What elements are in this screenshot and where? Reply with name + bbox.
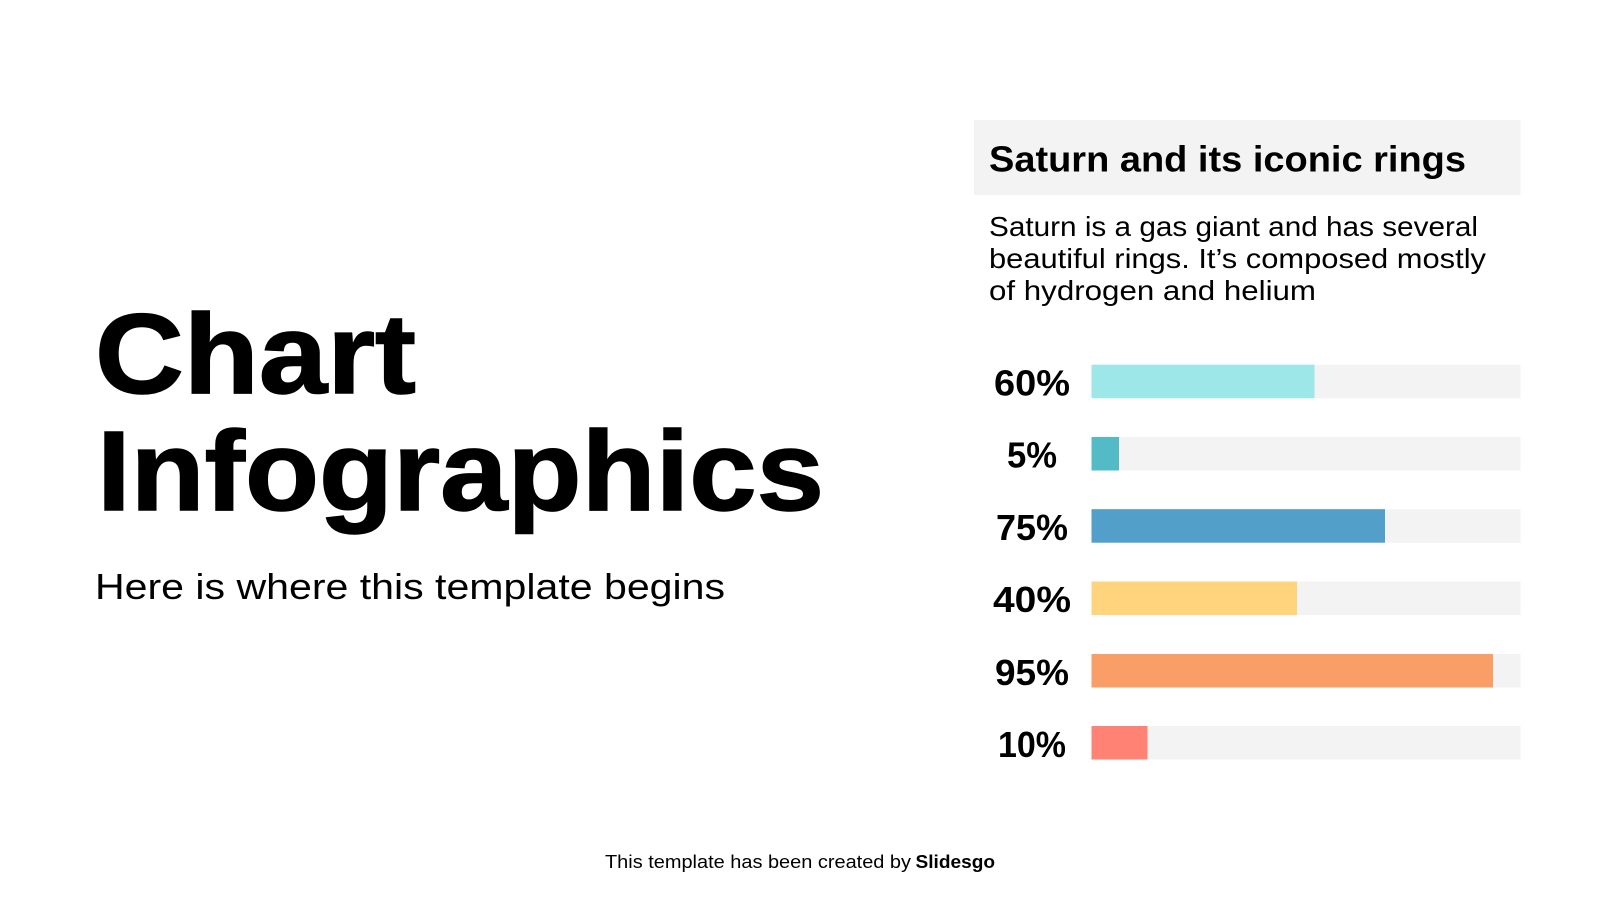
bar row: 10% bbox=[998, 724, 1520, 765]
footer credit: This template has been created by bbox=[605, 852, 911, 872]
title: Chart bbox=[95, 291, 416, 417]
panel: heading band bbox=[974, 120, 1520, 195]
description text: of hydrogen and helium bbox=[989, 275, 1316, 306]
bar row: 5% bbox=[1007, 434, 1520, 476]
heading: Saturn and its iconic rings bbox=[989, 138, 1466, 180]
subtitle: Here is where this template begins bbox=[95, 566, 725, 607]
bar row: 10%: 10% bbox=[998, 724, 1066, 765]
description text: beautiful rings. It’s composed mostly bbox=[989, 243, 1486, 274]
footer credit: Slidesgo bbox=[916, 852, 995, 872]
bar row: 40%: 40% bbox=[993, 579, 1071, 620]
bar row: 95% bbox=[995, 652, 1520, 693]
title: Infographics bbox=[97, 408, 824, 534]
bar row: 40% bbox=[993, 579, 1520, 620]
bar row: 5%: 5% bbox=[1007, 434, 1057, 476]
bar row: 75% bbox=[996, 507, 1520, 548]
description text: Saturn is a gas giant and has several bbox=[989, 211, 1478, 242]
bar row: 95%: 95% bbox=[995, 652, 1069, 693]
bar chart bbox=[993, 362, 1520, 765]
title bbox=[95, 291, 824, 534]
description text bbox=[989, 211, 1486, 306]
bar row: 60%: 60% bbox=[994, 362, 1070, 404]
bar row: 60% bbox=[994, 362, 1520, 404]
bar row: 75%: 75% bbox=[996, 507, 1068, 548]
